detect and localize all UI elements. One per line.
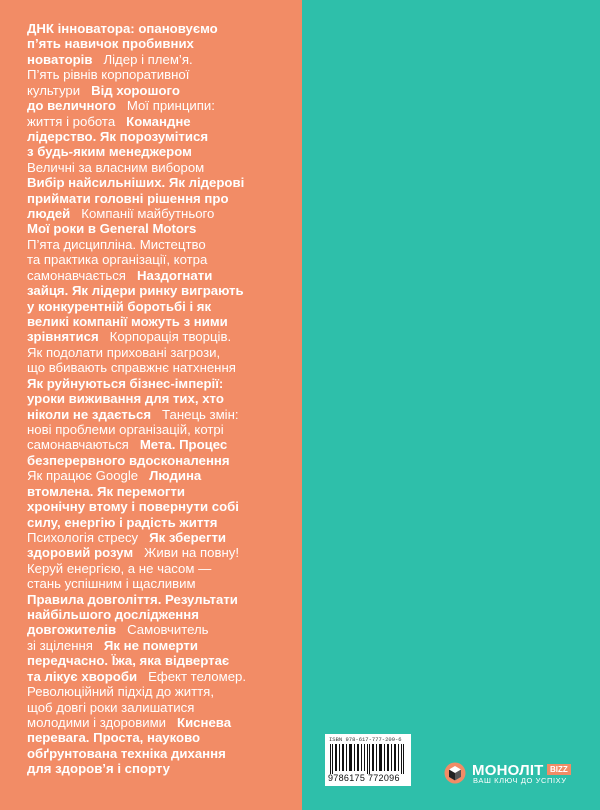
text block: book list: нові проблеми організацій, котрі xyxy=(27,422,224,437)
logo: Моноліт xyxy=(444,762,571,785)
text block: book list: та практика організації, котра xyxy=(27,252,207,267)
text block: book list: Психологія стресу Як зберегти xyxy=(27,530,226,545)
text block: book list: Правила довголіття. Результати xyxy=(27,592,238,607)
text block: book list: зайця. Як лідери ринку виграють xyxy=(27,283,244,298)
text block: book list: зі зцілення Як не померти xyxy=(27,638,198,653)
text block: book list: ДНК інноватора: опановуємо xyxy=(27,21,218,36)
text block: book list: молодими і здоровими Киснева xyxy=(27,715,231,730)
text block: book list: Керуй енергією, а не часом — xyxy=(27,561,211,576)
text block: book list: Як подолати приховані загрози, xyxy=(27,345,220,360)
text block: book list: зрівнятися Корпорація творців. xyxy=(27,329,231,344)
text block: book list: новаторів Лідер і плем’я. xyxy=(27,52,193,67)
text block: book list xyxy=(27,21,246,776)
text block: book list: п’ять навичок пробивних xyxy=(27,36,194,51)
text block: book list: Як руйнуються бізнес-імперії: xyxy=(27,376,223,391)
text block: book list: людей Компанії майбутнього xyxy=(27,206,214,221)
text block: book list: та лікує хвороби Ефект теломер. xyxy=(27,669,246,684)
text block: book list: Мої роки в General Motors xyxy=(27,221,196,236)
text block: book list: самонавчається Наздогнати xyxy=(27,268,212,283)
text block: book list: культури Від хорошого xyxy=(27,83,180,98)
barcode xyxy=(325,734,411,786)
text block: book list: лідерство. Як порозумітися xyxy=(27,129,208,144)
text block: book list: найбільшого дослідження xyxy=(27,607,199,622)
icon: cube xyxy=(444,762,466,784)
text block: book list: самонавчаються Мета. Процес xyxy=(27,437,227,452)
text block: book list: приймати головні рішення про xyxy=(27,191,228,206)
text block: book list: Величні за власним вибором xyxy=(27,160,204,175)
logo: Моноліт: ВАШ КЛЮЧ ДО УСПІХУ xyxy=(473,776,567,785)
text block: book list: ніколи не здається Танець змін: xyxy=(27,407,239,422)
text block: book list: щоб довгі роки залишатися xyxy=(27,700,194,715)
text block: book list: силу, енергію і радість життя xyxy=(27,514,217,530)
text block: book list: великі компанії можуть з ними xyxy=(27,314,228,329)
text block: book list: П’ять рівнів корпоративної xyxy=(27,67,189,82)
text block: book list: до величного Мої принципи: xyxy=(27,98,215,113)
text block: book list: передчасно. Їжа, яка відвертає xyxy=(27,653,229,668)
text block: book list: Вибір найсильніших. Як лідерові xyxy=(27,175,244,190)
logo: Моноліт: BIZZ xyxy=(550,765,568,774)
text block: book list: уроки виживання для тих, хто xyxy=(27,391,224,406)
text block: book list: перевага. Проста, науково xyxy=(27,730,200,745)
text block: book list: стань успішним і щасливим xyxy=(27,576,196,591)
text block: book list: Революційний підхід до життя, xyxy=(27,684,214,699)
text block: book list: що вбивають справжнє натхнення xyxy=(27,360,236,375)
text block: book list: Як працює Google Людина xyxy=(27,468,201,483)
text block: book list: для здоров’я і спорту xyxy=(27,761,170,776)
text block: book list: безперервного вдосконалення xyxy=(27,453,230,468)
text block: book list: хронічну втому і повернути собі xyxy=(27,499,239,514)
barcode: ISBN 978-617-777-209-6 xyxy=(329,736,402,743)
text block: book list: обґрунтована техніка дихання xyxy=(27,746,226,761)
text block: book list: у конкурентній боротьбі і як xyxy=(27,299,211,314)
text block: book list: втомлена. Як перемогти xyxy=(27,484,185,499)
text block: book list: П’ята дисципліна. Мистецтво xyxy=(27,237,206,252)
logo: Моноліт: МОНОЛІТ xyxy=(472,762,544,779)
text block: book list: з будь-яким менеджером xyxy=(27,144,192,159)
panel: orange left xyxy=(0,0,302,810)
text block: book list: здоровий розум Живи на повну! xyxy=(27,545,239,560)
text block: book list: життя і робота Командне xyxy=(27,114,191,129)
text block: book list: довгожителів Самовчитель xyxy=(27,622,209,637)
barcode: 9786175 772096 xyxy=(328,773,400,783)
